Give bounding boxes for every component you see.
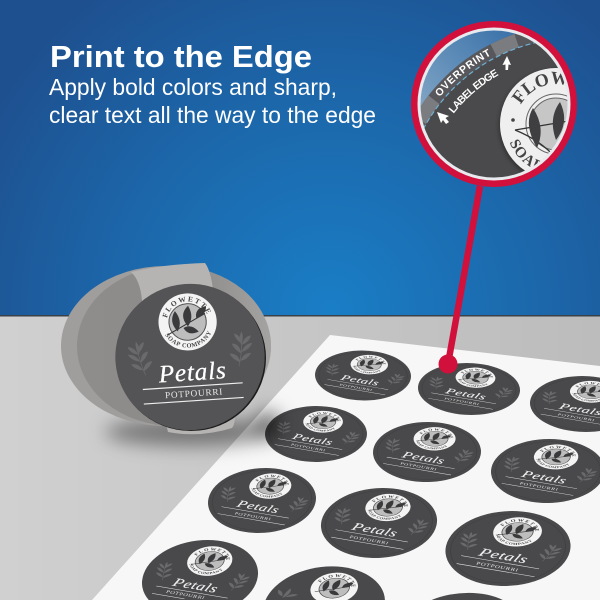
paper band <box>131 263 236 434</box>
product name: Petals <box>157 357 227 389</box>
magnified logo: FLOW <box>511 72 564 104</box>
soap bar with label <box>61 263 271 435</box>
sheet label 11 (cut by page bottom) <box>265 558 398 600</box>
white inner ring <box>419 29 569 179</box>
label divider lines <box>143 383 244 404</box>
magnifier callout <box>411 21 577 187</box>
red pointer line <box>448 186 480 364</box>
sheet label 5 <box>359 415 495 489</box>
sheet label 8: Petals <box>348 521 400 540</box>
sheet label 6: POTPOURRI <box>518 482 559 492</box>
sheet label 10 (cut by page bottom): Petals <box>169 576 221 596</box>
sheet label 1: POTPOURRI <box>339 383 374 392</box>
arrow right <box>502 56 511 70</box>
label sheet <box>92 335 600 600</box>
dark label area <box>424 43 558 178</box>
magnified logo <box>498 68 568 172</box>
sheet label 7: POTPOURRI <box>233 512 272 522</box>
sheet label 12 (cut by page bottom) <box>432 587 504 600</box>
label edge dashed line <box>424 42 536 128</box>
sheet label 2: Petals <box>443 386 488 402</box>
heading: Print to the Edge: Print to the Edge <box>50 39 312 74</box>
sheet labels <box>130 344 600 600</box>
subheading line 2: clear text all the way to the edge <box>49 102 376 128</box>
sheet label 9: Petals <box>475 546 531 566</box>
subheading line 1: Apply bold colors and sharp, <box>49 74 337 100</box>
sheet label 5: POTPOURRI <box>399 462 437 472</box>
magnified logo: SOAP <box>510 140 540 167</box>
sheet label 9: POTPOURRI <box>475 562 519 573</box>
overprint band <box>420 34 534 126</box>
label edge text: LABEL EDGE <box>448 69 498 114</box>
soap body <box>61 266 271 426</box>
sheet label 10 (cut by page bottom) <box>130 532 275 600</box>
sheet label 8 <box>305 480 453 566</box>
sheet label 2 <box>406 356 532 422</box>
magnified content <box>420 30 568 178</box>
overprint text: OVERPRINT <box>436 48 490 96</box>
arrow left <box>437 112 449 124</box>
soap label <box>110 279 270 435</box>
sheet label 9 <box>428 502 588 595</box>
grey table surface <box>0 315 600 600</box>
sheet label 2: POTPOURRI <box>444 397 480 406</box>
soap shadow <box>105 410 282 446</box>
sheet label 4 <box>252 399 380 469</box>
sheet label 6: Petals <box>518 468 569 486</box>
sprigs <box>124 329 256 379</box>
sheet label 6 <box>476 431 600 511</box>
sheet label 1: Petals <box>338 374 381 388</box>
sheet label 3: POTPOURRI <box>557 413 595 423</box>
sheet label 7 <box>193 461 331 540</box>
product type: POTPOURRI <box>165 386 223 400</box>
sheet label 1 <box>303 344 423 407</box>
pointer dot <box>438 354 458 374</box>
sheet label 4: Petals <box>289 431 335 447</box>
sheet label 8: POTPOURRI <box>348 535 390 546</box>
blue background <box>0 0 600 317</box>
sheet label 3 <box>517 369 600 439</box>
logo badge <box>157 292 219 352</box>
sheet label 4: POTPOURRI <box>290 443 327 452</box>
sheet label 7: Petals <box>234 498 282 516</box>
sheet label 5: Petals <box>399 449 447 466</box>
